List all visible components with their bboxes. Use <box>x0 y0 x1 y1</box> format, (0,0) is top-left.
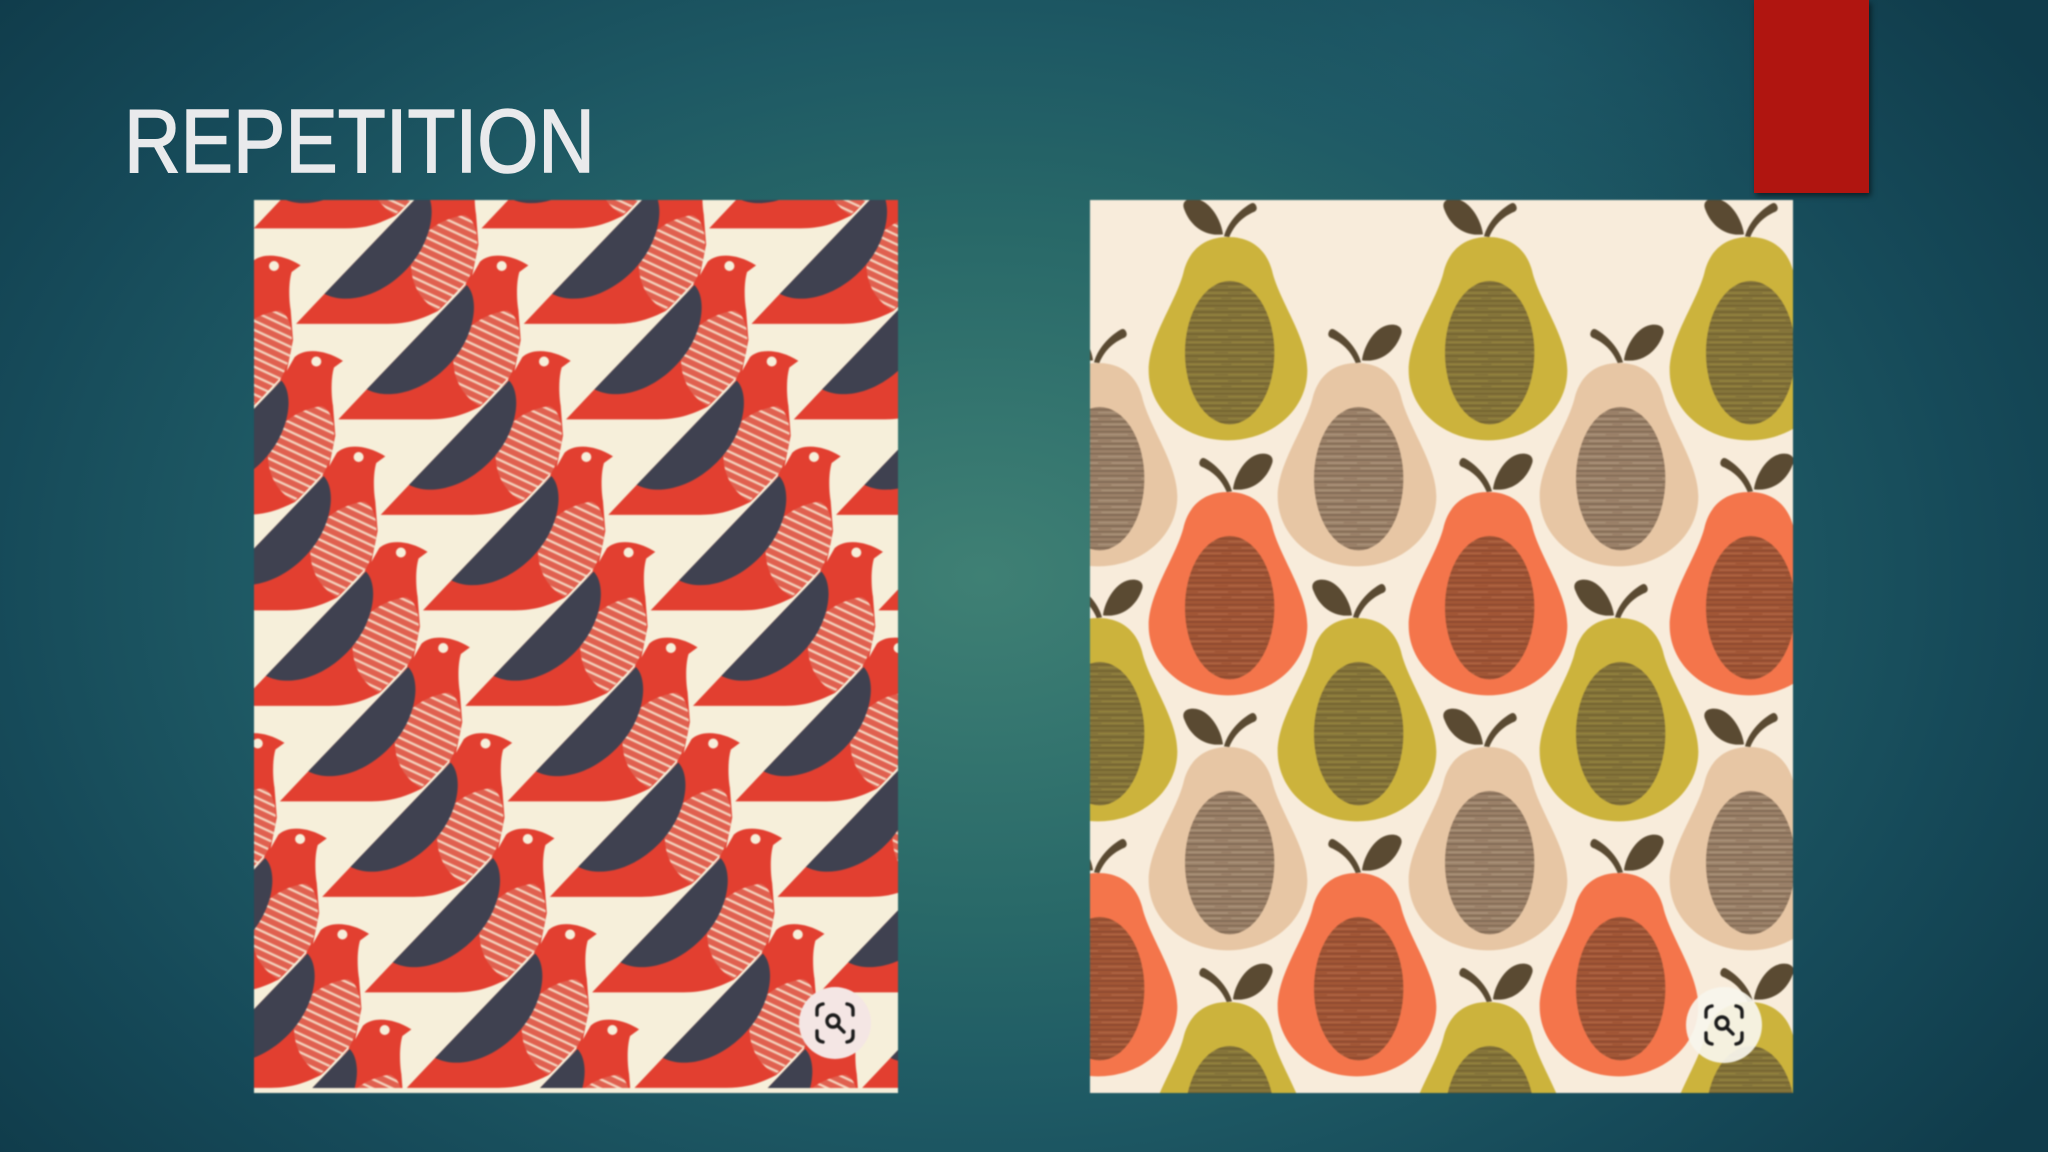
icon: image search button on pears <box>1686 987 1762 1063</box>
bird row 2 <box>296 199 899 325</box>
bird row 8 <box>253 732 899 898</box>
bird row 5 <box>253 446 899 612</box>
bird row 1 <box>254 199 866 230</box>
pear column 6 <box>1668 199 1794 1094</box>
bird row 3 <box>253 254 899 420</box>
pear column 4 <box>1409 199 1567 1152</box>
pear column 5 <box>1540 325 1698 1076</box>
bird row 11 <box>312 1018 859 1089</box>
panel: pear pattern <box>1089 199 1794 1094</box>
pear column 2 <box>1149 199 1307 1152</box>
icon: image search button on birds <box>799 987 871 1059</box>
bird row 4 <box>253 350 899 516</box>
bird row 10 <box>253 923 899 1089</box>
pear column 1 <box>1089 328 1178 1078</box>
bird row 7 <box>280 636 899 802</box>
bird row 9 <box>253 828 899 994</box>
title: REPETITION <box>124 92 595 192</box>
bird row 6 <box>237 542 883 706</box>
red accent tab <box>1754 0 1869 193</box>
pear column 3 <box>1278 325 1436 1076</box>
panel: bird pattern <box>253 199 899 1094</box>
